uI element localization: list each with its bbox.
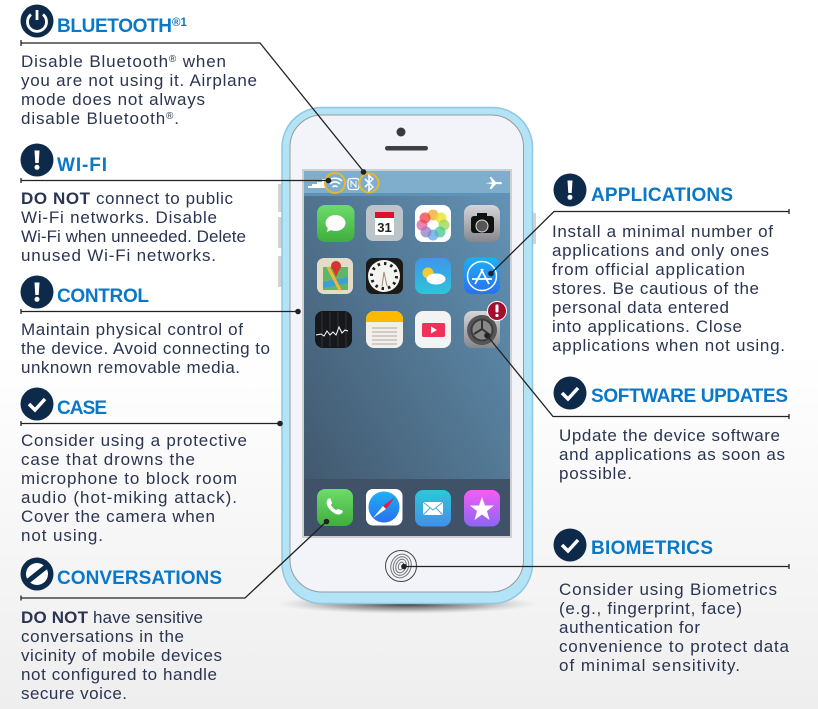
icon: power [20, 4, 54, 38]
icon: stocks [315, 311, 352, 348]
camera [396, 128, 406, 136]
text: bluetooth: when [177, 52, 226, 71]
app icons [315, 205, 506, 526]
icon: safari [366, 489, 402, 526]
text: applications: personal data entered [552, 298, 729, 317]
text: case: not using. [21, 526, 103, 545]
text: case: Consider using a protective [21, 431, 247, 450]
text: bluetooth: ® [169, 54, 177, 65]
text: biometrics: of minimal sensitivity. [559, 656, 740, 675]
leader line: conversations [21, 519, 329, 600]
panel: case [20, 388, 283, 545]
text: biometrics: authentication for [559, 618, 700, 637]
text: bluetooth: mode does not always [21, 90, 205, 109]
text: case: audio (hot-miking attack). [21, 488, 237, 507]
text: bluetooth: . [174, 109, 179, 128]
text: wi-fi: Wi-Fi networks. Disable [21, 208, 217, 227]
heading: control: CONTROL [57, 286, 149, 307]
text: applications: stores. Be cautious of the [552, 279, 759, 298]
phone body [290, 115, 524, 592]
text: case: Cover the camera when [21, 507, 215, 526]
icon: clock [366, 258, 403, 294]
heading: bluetooth: BLUETOOTH [57, 16, 172, 37]
text: conversations: not configured to handle [21, 665, 217, 684]
icon: maps [317, 258, 353, 294]
text: applications: Install a minimal number of [552, 222, 773, 241]
text: bluetooth: disable Bluetooth [21, 109, 165, 128]
icon: camera [464, 205, 500, 242]
heading: wi-fi: WI-FI [57, 155, 107, 176]
panel: conversations [20, 519, 329, 703]
home button with fingerprint [386, 550, 416, 582]
leader line: case [21, 421, 283, 426]
icon: wifi [325, 173, 345, 193]
icon: videos [415, 311, 451, 348]
text: conversations: vicinity of mobile devices [21, 646, 222, 665]
dock [304, 479, 510, 536]
status bar [304, 171, 510, 196]
text: case [21, 431, 247, 545]
leader line: software updates [484, 333, 789, 419]
text: software updates [559, 426, 785, 483]
icon: calendar [366, 205, 403, 241]
panel: biometrics [401, 528, 790, 675]
text: conversations: conversations in the [21, 627, 184, 646]
text: case: case that drowns the [21, 450, 195, 469]
heading: applications: APPLICATIONS [591, 185, 733, 206]
leader line: applications [488, 209, 789, 276]
heading: case: CASE [57, 398, 107, 419]
icon: phone [317, 489, 353, 526]
leader line: control [21, 309, 301, 314]
panel: control [20, 276, 301, 377]
text: software updates: and applications as soon as [559, 445, 785, 464]
icon: mail [415, 490, 451, 526]
text: software updates: possible. [559, 464, 632, 483]
text: applications: into applications. Close [552, 317, 742, 336]
text: software updates: Update the device software [559, 426, 780, 445]
panel: applications [488, 174, 789, 355]
side buttons [278, 184, 536, 287]
icon: itunes star [464, 490, 500, 526]
heading: conversations: CONVERSATIONS [57, 568, 222, 589]
text: case: microphone to block room [21, 469, 237, 488]
text: control: unknown removable media. [21, 358, 240, 377]
icon: exclamation [554, 174, 586, 206]
heading: biometrics: BIOMETRICS [591, 538, 713, 559]
icon: app store [464, 258, 500, 294]
icon: calendar: 31 [377, 220, 392, 235]
text: bluetooth: Disable Bluetooth [21, 52, 168, 71]
text: bluetooth [21, 52, 257, 128]
panel: bluetooth [20, 4, 366, 175]
icon: notes [366, 311, 403, 348]
icon: photos [415, 205, 451, 242]
heading superscript: ®1 [172, 17, 187, 29]
icon: weather [415, 258, 451, 294]
text: conversations: DO NOT have sensitive [21, 608, 203, 627]
icon: prohibited [20, 558, 54, 590]
text: control [21, 320, 270, 377]
text: biometrics: convenience to protect data [559, 637, 790, 656]
text: bluetooth: you are not using it. Airplane [21, 71, 257, 90]
text: applications: applications when not using. [552, 336, 785, 355]
text: conversations [21, 608, 222, 703]
leader line: biometrics [401, 564, 789, 569]
text: biometrics: Consider using Biometrics [559, 580, 777, 599]
text: wi-fi [21, 189, 246, 265]
leader line: wi-fi [21, 178, 331, 183]
icon: airplane [486, 177, 502, 189]
text: wi-fi: Wi-Fi when unneeded. Delete [21, 227, 246, 246]
text: wi-fi: DO NOT connect to public [21, 189, 234, 208]
icon: bluetooth [360, 174, 378, 192]
icon: check [554, 376, 586, 410]
icon: exclamation [20, 144, 54, 176]
icon: messages [317, 205, 354, 242]
phone shadow [277, 594, 537, 614]
heading: software updates: SOFTWARE UPDATES [591, 386, 788, 407]
phone case [282, 108, 532, 604]
speaker [385, 146, 428, 150]
leader line: bluetooth [21, 40, 366, 175]
text: applications [552, 222, 785, 355]
icon: exclamation [20, 276, 54, 308]
text: applications: applications and only ones [552, 241, 769, 260]
text: applications: from official application [552, 260, 745, 279]
panel: software updates [484, 333, 789, 483]
phone illustration [277, 108, 537, 614]
icon: check [20, 388, 54, 420]
icon: settings [464, 311, 500, 348]
text: biometrics: (e.g., fingerprint, face) [559, 599, 742, 618]
icon: alert badge [488, 302, 506, 320]
icon: nfc [348, 178, 359, 190]
text: conversations: secure voice. [21, 684, 127, 703]
screen [302, 169, 512, 538]
icon: check [554, 528, 586, 562]
panel: wi-fi [20, 144, 331, 265]
text: control: Maintain physical control of [21, 320, 243, 339]
text: control: the device. Avoid connecting to [21, 339, 270, 358]
text: wi-fi: unused Wi-Fi networks. [21, 246, 216, 265]
text: biometrics [559, 580, 790, 675]
text: bluetooth: ® [166, 111, 174, 122]
